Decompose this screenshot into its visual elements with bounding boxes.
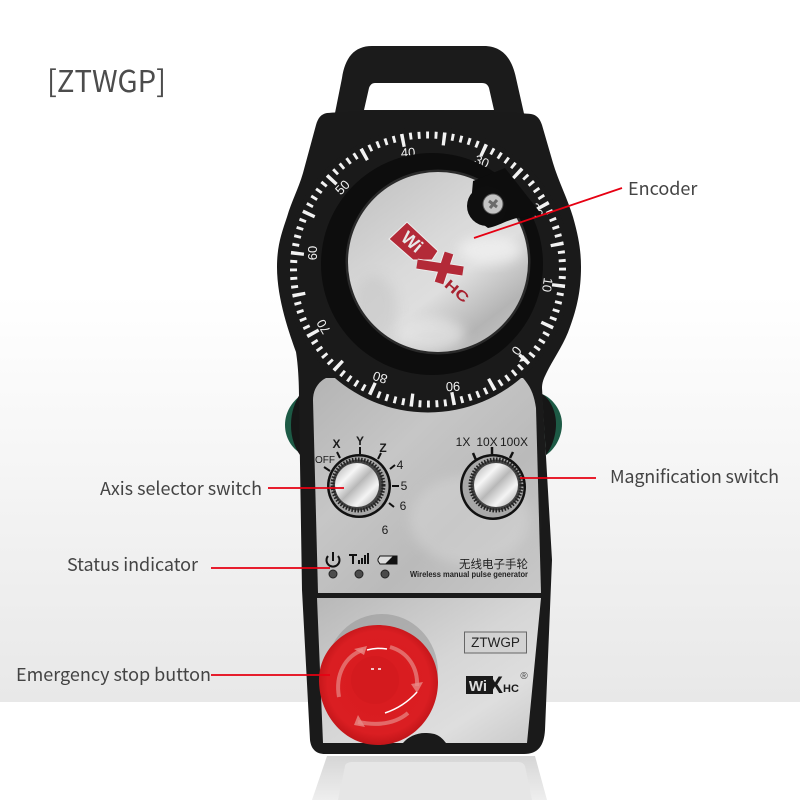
callout: axis selector switch: Axis selector switch xyxy=(100,475,262,501)
handwheel device xyxy=(277,46,581,754)
magnification switch xyxy=(456,435,528,520)
status indicators xyxy=(327,552,397,578)
logo: WiXHC black: HC xyxy=(503,683,519,695)
axis switch labels: 5 xyxy=(401,479,408,493)
axis selector switch xyxy=(315,434,408,537)
dial numbers: 70 xyxy=(313,317,334,337)
magnification labels xyxy=(456,435,528,449)
magnification labels: 100X xyxy=(500,435,528,449)
body outline xyxy=(277,111,581,754)
callout: encoder: Encoder xyxy=(628,175,698,201)
logo: WiXHC red: Wi xyxy=(397,227,427,257)
dial numbers: 50 xyxy=(332,177,353,198)
reflection of the device xyxy=(312,756,547,800)
logo: WiXHC red xyxy=(389,222,472,306)
callout: status indicator: Status indicator xyxy=(67,551,199,577)
model box: ZTWGP xyxy=(471,635,520,650)
axis switch labels: OFF xyxy=(315,455,335,466)
disc highlights xyxy=(353,236,522,353)
dial scale ticks xyxy=(278,120,578,419)
button gloss xyxy=(367,648,417,713)
dial numbers: 90 xyxy=(445,379,460,394)
dial numbers: 80 xyxy=(371,368,389,387)
magnification labels: 1X xyxy=(456,435,470,449)
callout: encoder xyxy=(474,175,698,238)
dial numbers: 10 xyxy=(539,277,556,293)
icon: power xyxy=(327,552,340,567)
arrow heads xyxy=(354,646,423,727)
emergency stop button xyxy=(319,614,438,745)
rotation arrows xyxy=(338,647,417,724)
dial numbers: 30 xyxy=(472,152,491,171)
logo: WiXHC black xyxy=(466,671,528,699)
logo: WiXHC black: X xyxy=(487,672,503,699)
dial numbers: 40 xyxy=(400,145,416,160)
icon: green side grips xyxy=(285,394,562,455)
axis switch labels: 6 xyxy=(400,499,407,513)
dial zero marker xyxy=(519,355,528,362)
dial numbers: 60 xyxy=(305,246,320,260)
product name text: Wireless manual pulse generator xyxy=(410,570,528,579)
logo: WiXHC black: ® xyxy=(520,671,528,682)
button center recess xyxy=(351,656,399,704)
handle xyxy=(334,46,525,118)
callout: emergency stop button: Emergency stop button xyxy=(16,661,211,687)
axis switch tick marks xyxy=(324,447,399,507)
plate brushed sheen xyxy=(410,475,530,565)
axis switch labels: 6 xyxy=(382,523,389,537)
inner black ring xyxy=(321,153,543,375)
logo: WiXHC red: HC xyxy=(442,276,472,306)
axis switch labels xyxy=(315,434,408,537)
dial numbers: 0 xyxy=(508,343,525,358)
title: [ZTWGP] xyxy=(47,57,166,101)
dial numbers: 20 xyxy=(527,200,547,220)
axis switch labels: Y xyxy=(356,434,364,448)
axis switch labels: Z xyxy=(379,441,387,455)
icon: signal xyxy=(349,553,368,564)
axis switch labels: X xyxy=(332,437,341,451)
indicator leds xyxy=(329,570,389,578)
panel: encoder dial xyxy=(290,132,566,412)
icon: disc crank screw xyxy=(467,168,542,228)
product name text: 无线电子手轮 xyxy=(459,556,528,572)
axis switch labels: 4 xyxy=(397,458,404,472)
product name text xyxy=(410,556,528,579)
magnification tick marks xyxy=(473,447,513,460)
dial numbers xyxy=(305,145,556,394)
icon: battery xyxy=(378,556,397,564)
model box xyxy=(464,632,526,653)
callout: magnification switch: Magnification switch xyxy=(610,463,779,489)
magnification labels: 10X xyxy=(476,435,498,449)
panel: lower plate xyxy=(317,598,541,745)
dial black bezel xyxy=(285,126,571,412)
logo: WiXHC black: Wi xyxy=(469,678,487,695)
aluminum encoder disc xyxy=(346,170,530,354)
panel: upper control plate xyxy=(313,378,541,593)
